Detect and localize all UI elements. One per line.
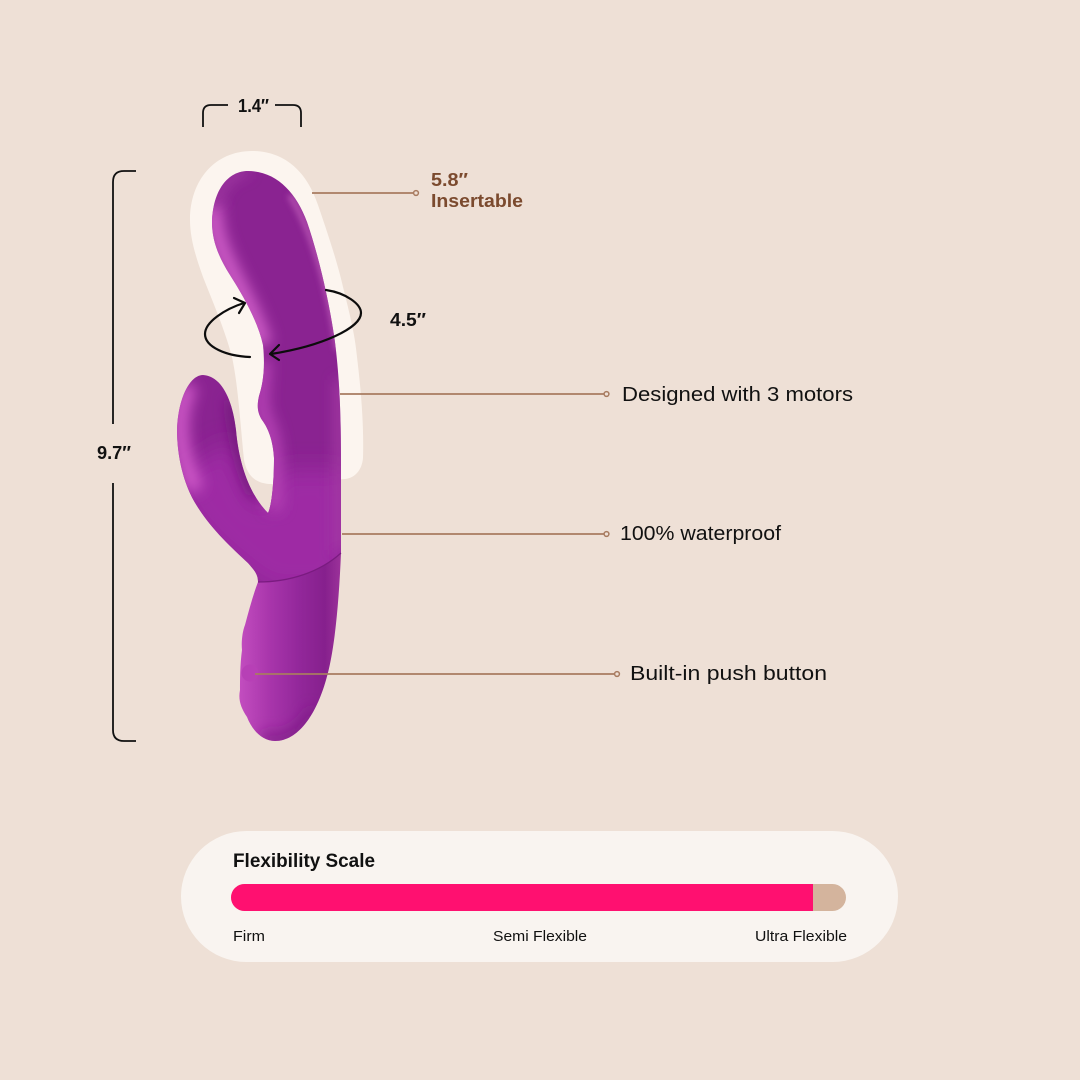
girth rotation arrow	[205, 290, 361, 360]
scale label: semi flexible: Semi Flexible	[493, 928, 587, 945]
panel: flexibility scale	[181, 831, 898, 962]
motors text: Designed with 3 motors	[622, 384, 853, 406]
width value: 1.4″	[238, 96, 269, 116]
height dimension bracket	[97, 171, 136, 741]
upper body shading	[170, 171, 345, 590]
scale label: firm: Firm	[233, 928, 265, 945]
scale label: ultra flexible: Ultra Flexible	[755, 928, 847, 945]
height value: 9.7″	[97, 443, 131, 463]
insertable text: Insertable	[431, 191, 523, 211]
seam line	[258, 553, 341, 582]
push button	[242, 664, 258, 682]
width dimension bracket	[203, 96, 301, 127]
scale fill	[231, 884, 813, 911]
infographic canvas	[98, 99, 898, 962]
callout: insertable length	[312, 170, 523, 211]
callout: waterproof	[342, 523, 781, 545]
waterproof text: 100% waterproof	[620, 523, 781, 545]
scale heading: Flexibility Scale	[233, 851, 375, 872]
product illustration	[170, 171, 345, 741]
insertable text: 5.8″	[431, 170, 468, 190]
callout: motors	[340, 384, 853, 406]
girth value: 4.5″	[390, 310, 426, 330]
scale track	[231, 884, 846, 911]
callout: push button	[255, 663, 827, 685]
handle	[239, 553, 341, 741]
upper body and arm	[177, 171, 341, 582]
insertable length halo	[190, 151, 363, 484]
handle shading	[262, 710, 315, 739]
push button text: Built-in push button	[630, 663, 827, 685]
